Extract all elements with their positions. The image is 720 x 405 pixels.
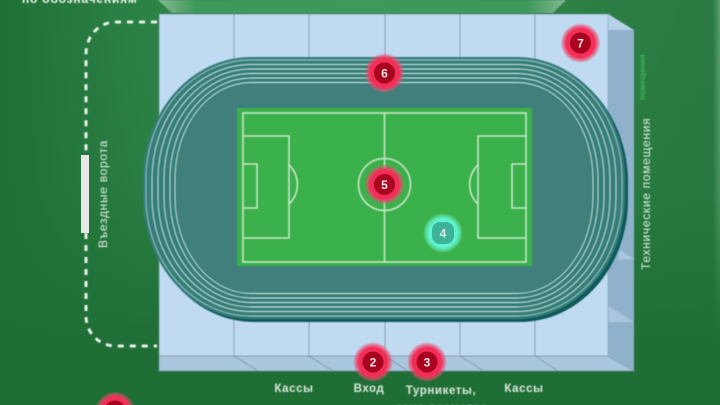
running track: [143, 57, 628, 322]
entry gate: [81, 155, 89, 233]
stands: right top corner: [608, 14, 634, 30]
track lanes: [146, 60, 622, 316]
stadium stands: [159, 14, 634, 371]
marker 7: 7: [577, 36, 584, 50]
marker 6: [364, 53, 404, 93]
stands: right face: [608, 30, 634, 371]
marker 2: [353, 342, 393, 382]
marker 5: 5: [381, 178, 388, 192]
stands: seating dividers: [159, 14, 608, 371]
label: turnstiles: Турникеты,: [406, 385, 476, 397]
marker 4: [423, 213, 463, 253]
label: ticket office left: Кассы: [274, 383, 314, 395]
top roof fragment: [158, 0, 566, 13]
marker 3: [407, 342, 447, 382]
marker 5: [364, 164, 404, 204]
label: entry gate: Въездные ворота: [96, 140, 110, 248]
marker 3: 3: [424, 356, 431, 370]
stands: right face facets: [608, 250, 634, 322]
marker 2: 2: [370, 356, 377, 370]
label: ticket office right: Кассы: [504, 383, 544, 395]
marker 6: 6: [381, 66, 388, 80]
stands: bottom face: [159, 356, 634, 371]
marker 7: [560, 23, 600, 63]
faint green side label: помещения: [638, 54, 647, 100]
marker 1: [95, 392, 135, 405]
marker 4: 4: [440, 226, 447, 240]
label: technical rooms: Технические помещения: [639, 118, 653, 270]
label: entrance: Вход: [354, 383, 385, 395]
entry route dashed path: [86, 22, 157, 346]
football pitch: [237, 108, 532, 266]
track infield: [176, 83, 592, 293]
